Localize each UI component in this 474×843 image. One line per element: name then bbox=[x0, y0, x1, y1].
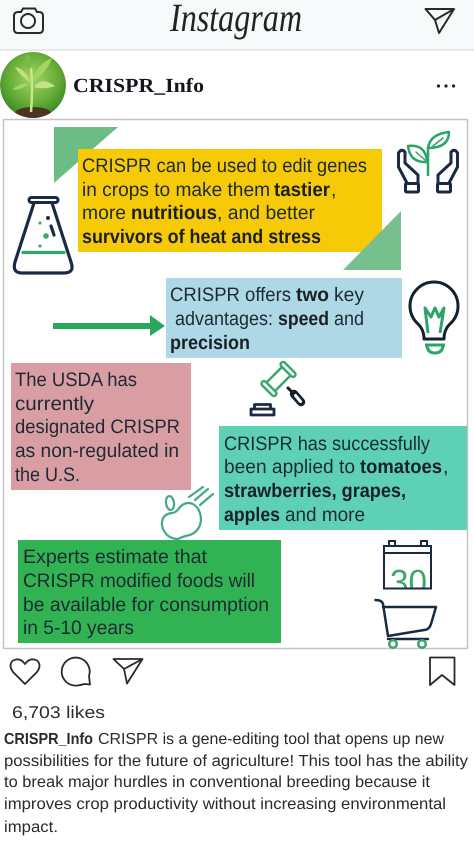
panel: teal applications: apples bbox=[224, 504, 280, 526]
icon: light bulb bbox=[410, 282, 458, 353]
icon: share bbox=[114, 659, 142, 684]
panel: pink USDA: as non-regulated in bbox=[15, 440, 179, 462]
decorative triangle top-left bbox=[54, 127, 118, 183]
panel: yellow crop benefits: , bbox=[331, 179, 336, 201]
caption: impact. bbox=[4, 819, 58, 836]
likes count: 6,703 likes bbox=[12, 703, 105, 722]
panel: blue advantages: two bbox=[296, 284, 329, 306]
caption: CRISPR_Info bbox=[4, 731, 93, 748]
icon: gavel bbox=[251, 361, 301, 415]
profile row bbox=[0, 52, 455, 119]
icon: camera bbox=[14, 8, 43, 33]
icon: apple bbox=[162, 487, 213, 539]
account name: CRISPR_Info bbox=[73, 75, 204, 97]
caption: CRISPR is a gene-editing tool that opens up new bbox=[98, 731, 444, 748]
icon: flask bbox=[14, 198, 72, 273]
panel: pink USDA: the U.S. bbox=[15, 464, 80, 486]
panel: blue advantages: advantages: bbox=[175, 308, 273, 330]
panel: yellow crop benefits: in crops to make them bbox=[82, 179, 270, 201]
panel: pink USDA bbox=[11, 363, 191, 490]
decorative triangle bottom-right bbox=[343, 211, 401, 270]
panel: teal applications: and more bbox=[285, 504, 365, 526]
panel: green timeline bbox=[18, 540, 281, 643]
caption bbox=[4, 731, 468, 836]
more options dots bbox=[437, 84, 455, 88]
icon: direct message bbox=[426, 9, 454, 33]
panel: blue advantages: key bbox=[334, 284, 364, 306]
top app bar bbox=[0, 0, 474, 51]
action bar bbox=[10, 658, 454, 686]
panel: pink USDA: The USDA has bbox=[15, 369, 137, 391]
panel: teal applications bbox=[219, 426, 467, 530]
panel: pink USDA: currently bbox=[15, 393, 94, 415]
caption: improves crop productivity without increasing environmental bbox=[4, 796, 446, 813]
caption: possibilities for the future of agriculture! This tool has the ability bbox=[4, 753, 468, 770]
panel: blue advantages: speed bbox=[278, 308, 329, 330]
panel: yellow crop benefits: more bbox=[82, 202, 126, 224]
panel: teal applications: strawberries, grapes, bbox=[224, 480, 406, 502]
panel: green timeline: CRISPR modified foods will bbox=[23, 570, 255, 592]
panel: blue advantages bbox=[166, 278, 402, 358]
panel: yellow crop benefits bbox=[78, 149, 382, 252]
panel: yellow crop benefits: tastier bbox=[274, 179, 330, 201]
panel: green timeline: in 5-10 years bbox=[23, 617, 134, 639]
panel: yellow crop benefits: nutritious bbox=[131, 202, 217, 224]
avatar bbox=[0, 52, 66, 119]
panel: teal applications: , bbox=[443, 456, 448, 478]
icon: comment bbox=[62, 658, 90, 686]
icon: heart bbox=[10, 659, 40, 684]
panel: teal applications: tomatoes bbox=[360, 456, 442, 478]
icon: bookmark bbox=[430, 658, 454, 685]
panel: yellow crop benefits: CRISPR can be used to edit genes bbox=[82, 155, 367, 177]
panel: teal applications: CRISPR has successfully bbox=[224, 433, 430, 455]
panel: yellow crop benefits: , and better bbox=[217, 202, 315, 224]
panel: green timeline: be available for consumption bbox=[23, 594, 269, 616]
post image frame bbox=[4, 120, 468, 648]
panel: teal applications: been applied to bbox=[224, 456, 355, 478]
panel: pink USDA: designated CRISPR bbox=[15, 416, 180, 438]
panel: blue advantages: and bbox=[334, 308, 364, 330]
panel: blue advantages: CRISPR offers bbox=[170, 284, 291, 306]
panel: yellow crop benefits: survivors of heat and stress bbox=[82, 226, 321, 248]
icon: hands holding plant bbox=[398, 132, 458, 192]
caption: to break major hurdles in conventional breeding because it bbox=[4, 774, 431, 791]
panel: blue advantages: precision bbox=[170, 332, 250, 354]
icon: calendar: 30 bbox=[390, 563, 427, 602]
arrow to blue panel bbox=[53, 315, 165, 336]
icon: calendar bbox=[383, 540, 432, 590]
icon: shopping cart bbox=[376, 600, 436, 648]
panel: green timeline: Experts estimate that bbox=[23, 546, 208, 568]
